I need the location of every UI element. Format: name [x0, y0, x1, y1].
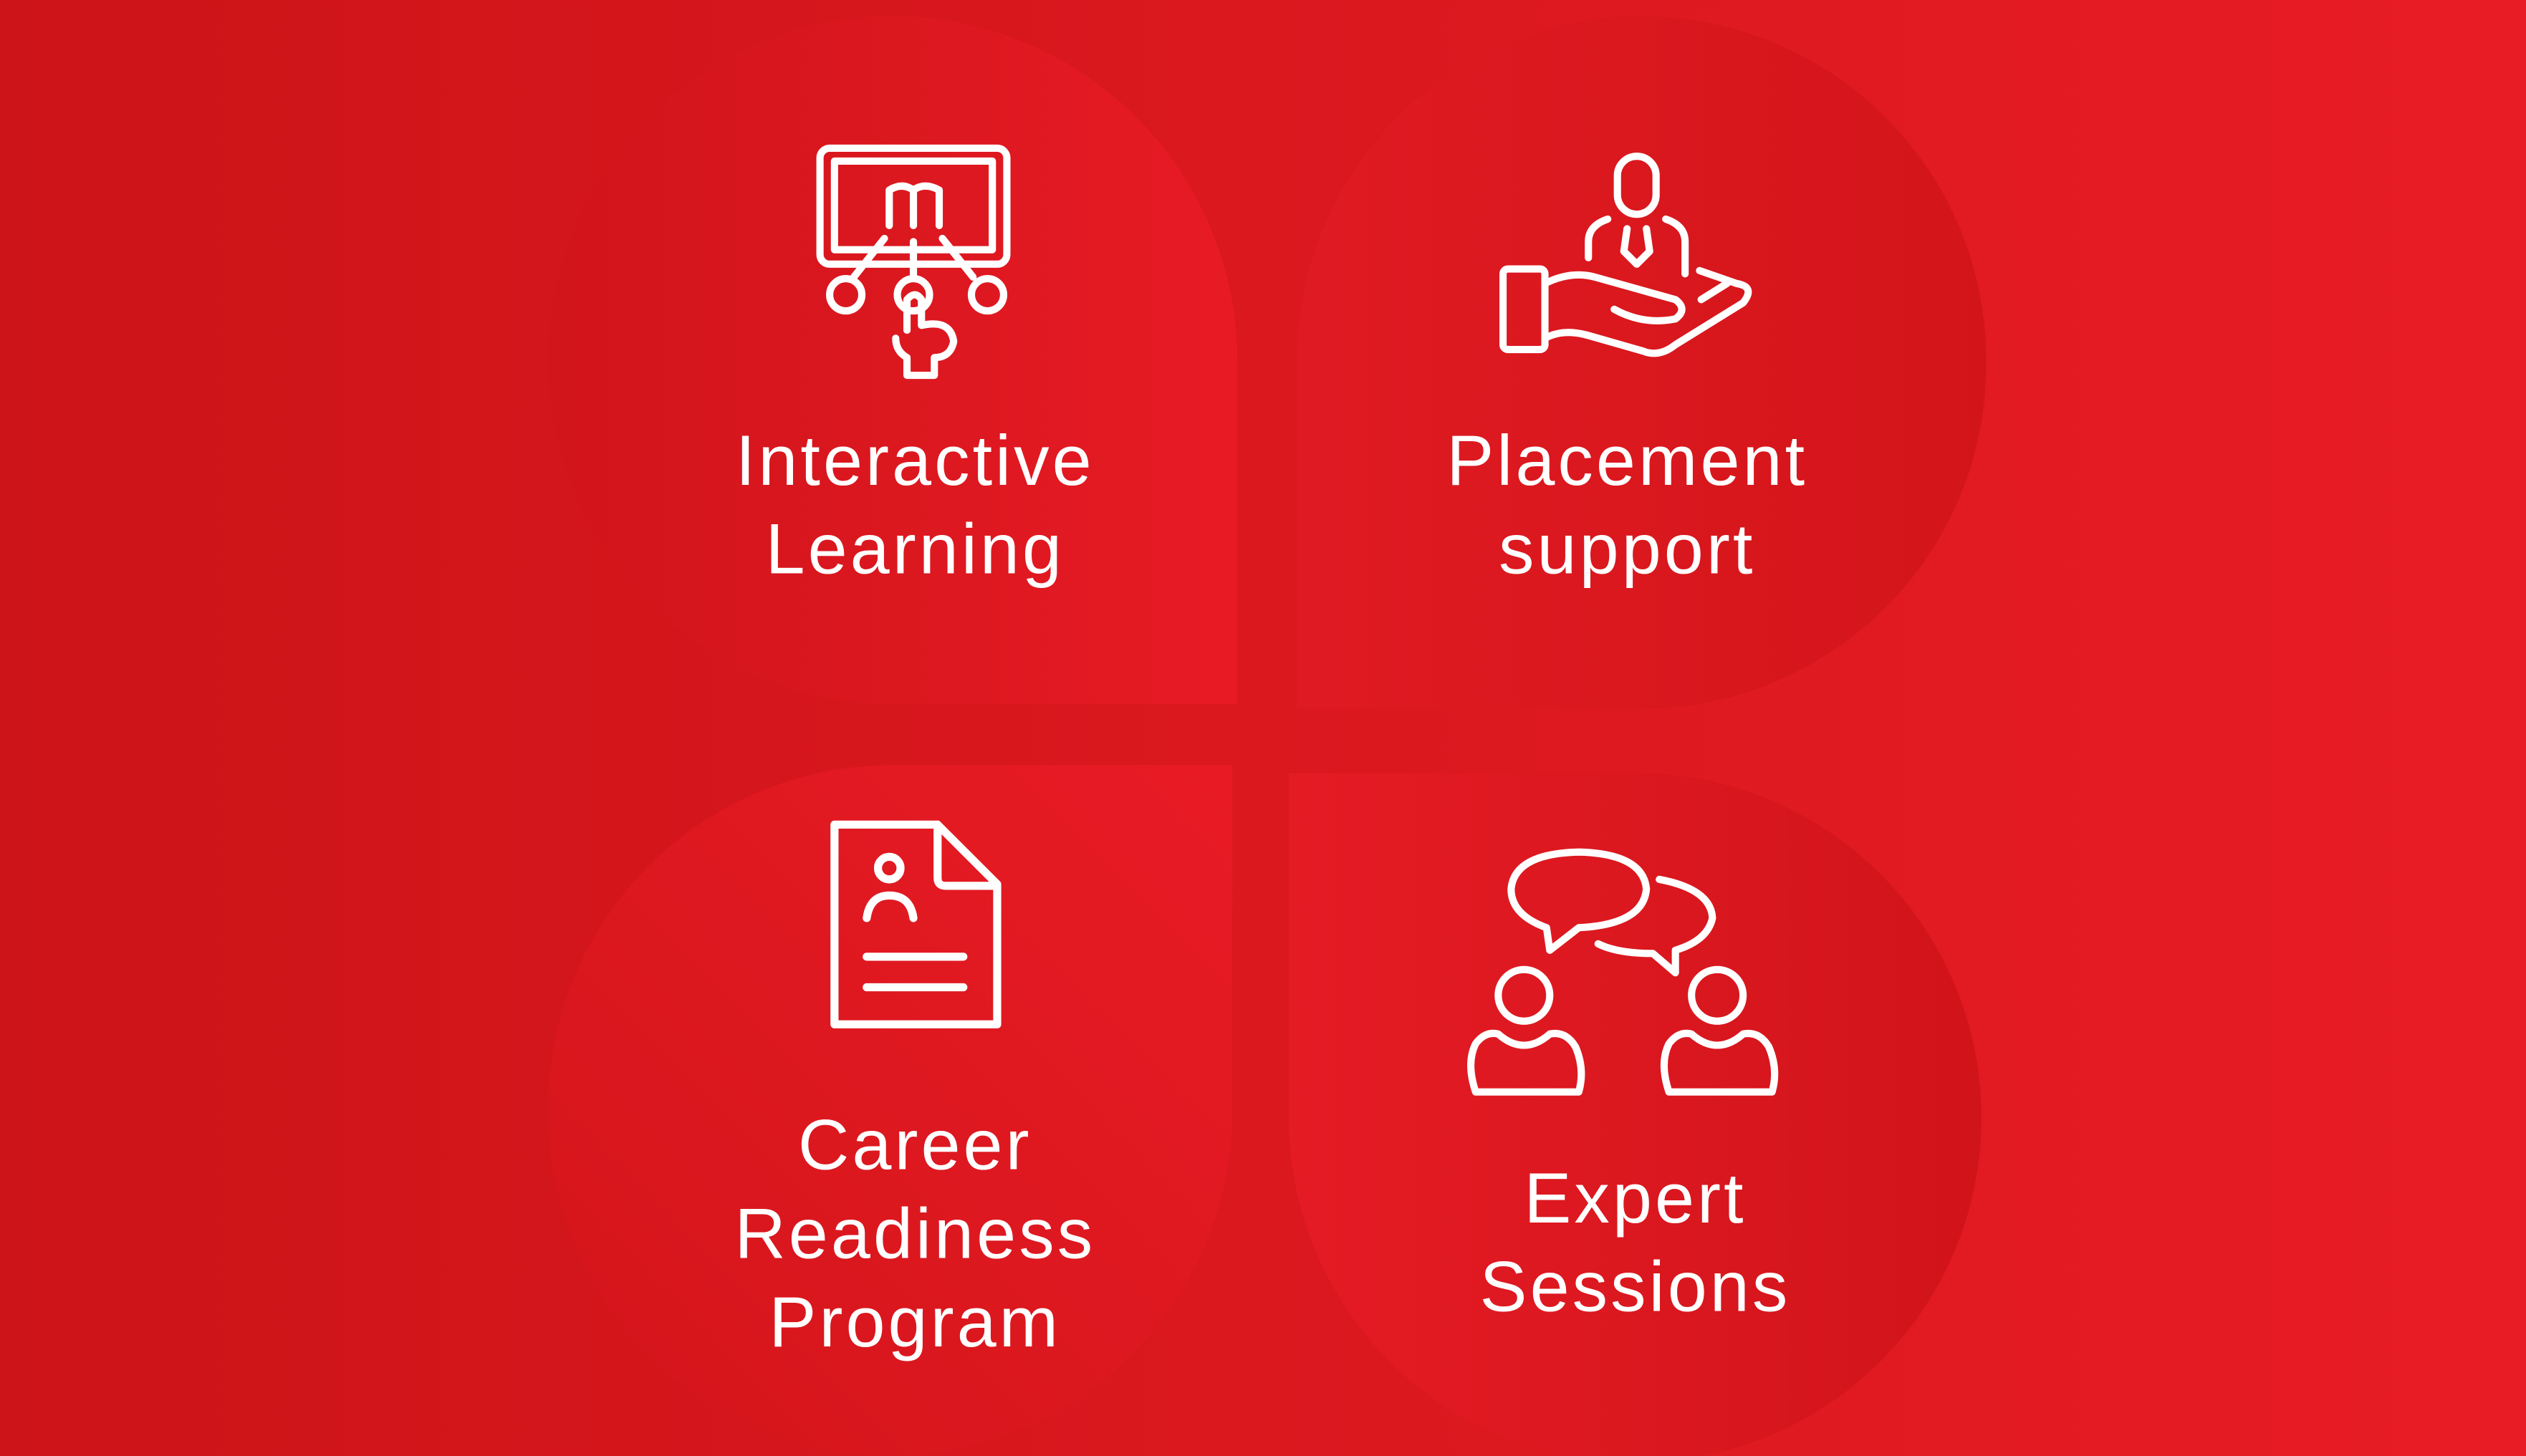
infographic canvas: Sessions — [1480, 1247, 1790, 1326]
infographic canvas: Learning — [766, 509, 1065, 589]
infographic canvas: Readiness — [734, 1193, 1095, 1273]
infographic canvas: support — [1499, 509, 1755, 589]
text: Interactive Learning: Interactive — [736, 420, 1095, 500]
panel: expert sessions — [1289, 773, 1982, 1456]
icon: hand holding person — [1503, 156, 1748, 353]
infographic canvas: Program — [769, 1282, 1061, 1361]
text: Placement support: Placement — [1446, 420, 1807, 500]
icon: two people talking — [1471, 852, 1775, 1092]
icon: resume document — [835, 824, 997, 1024]
text: Career Readiness Program: Career — [798, 1105, 1032, 1185]
panel: placement support — [1297, 16, 1987, 709]
icon: interactive screen — [820, 148, 1007, 375]
panel: interactive learning — [548, 16, 1237, 704]
panel: career readiness — [548, 765, 1232, 1456]
text: Expert Sessions: Expert — [1524, 1158, 1747, 1238]
